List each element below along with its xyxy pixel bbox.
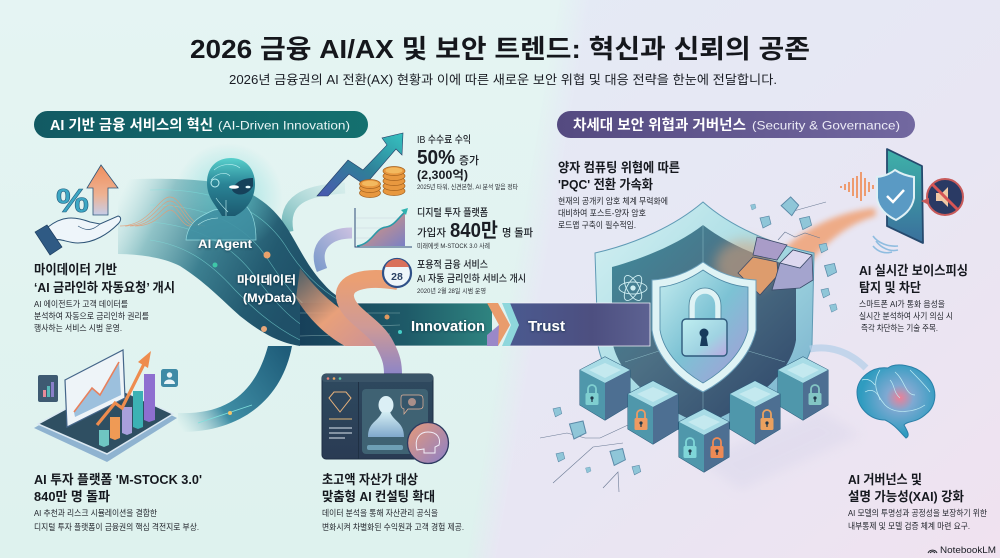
text block: high-net-worth consulting: 초고액 자산가 대상 — [322, 472, 418, 487]
text block: PQC transition — [558, 160, 680, 230]
text block: voice phishing: 탐지 및 차단 — [859, 280, 921, 295]
icon: hand with percent and arrow: % — [56, 182, 89, 219]
label: MyData — [237, 273, 296, 305]
connectors — [625, 392, 785, 403]
blocked speaker — [927, 179, 963, 215]
cube shadows — [700, 410, 860, 490]
text block: AI governance: 설명 가능성(XAI) 강화 — [848, 489, 964, 504]
lower ribbon — [178, 346, 292, 432]
icon: AI brain — [810, 348, 935, 438]
label: Trust: Trust — [528, 318, 565, 335]
NotebookLM badge: NotebookLM — [940, 545, 996, 556]
stat: IB fee income: 50% — [417, 147, 455, 169]
chevrons — [487, 303, 519, 346]
stat: digital platform users: 명 돌파 — [502, 227, 533, 239]
client panel — [362, 389, 428, 454]
text block: voice phishing: 즉각 차단하는 기술 주목. — [861, 323, 938, 333]
text block: high-net-worth consulting: 데이터 분석을 통해 자산관리 공식을 — [322, 508, 438, 518]
outer shield — [595, 202, 814, 440]
text block: mydata rate-cut request: 마이데이터 기반 — [34, 262, 117, 277]
stat: inclusive financial service: AI 자동 금리인하 서비스 개시 — [417, 272, 526, 285]
heading pill: AI-driven innovation: (AI-Driven Innovation) — [218, 118, 350, 132]
sound wave — [841, 172, 873, 201]
main data wave — [118, 179, 370, 346]
text block: voice phishing: AI 실시간 보이스피싱 — [859, 263, 968, 278]
subtitle: 2026년 금융권의 AI 전환(AX) 현황과 이에 따른 새로운 보안 위협 및 대응 전략을 한눈에 전달합니다. — [229, 73, 777, 87]
cube 4 — [730, 381, 780, 444]
flow ribbons — [118, 179, 492, 432]
main band — [300, 303, 492, 346]
label: MyData: (MyData) — [243, 293, 296, 305]
text block: mydata rate-cut request: 행사하는 서비스 시범 운영. — [34, 323, 122, 333]
icon: phone with shield — [841, 149, 963, 253]
orange-purple arc — [345, 279, 398, 375]
label: AI Agent: AI Agent — [198, 237, 252, 251]
text block: M-STOCK — [34, 472, 202, 532]
stat: digital platform users: 840만 — [450, 219, 498, 242]
text block: high-net-worth consulting — [322, 472, 464, 532]
chart screen — [65, 350, 125, 427]
padlock — [682, 288, 727, 356]
stat: digital platform users — [417, 206, 533, 250]
band streak lines — [300, 313, 400, 336]
text block: AI governance: AI 거버넌스 및 — [848, 472, 922, 487]
icon: area chart — [355, 208, 412, 247]
text block: M-STOCK: 840만 명 돌파 — [34, 489, 110, 504]
stat: inclusive financial service — [417, 259, 526, 295]
text block: PQC transition: 'PQC' 전환 가속화 — [558, 177, 653, 192]
stat: digital platform users: 디지털 투자 플랫폼 — [417, 206, 488, 219]
data lines on wave — [150, 190, 350, 340]
brain badge — [408, 422, 448, 464]
text block: PQC transition: 현재의 공개키 암호 체계 무력화에 — [558, 196, 668, 206]
diamond icon — [329, 392, 351, 412]
text block: AI governance: AI 모델의 투명성과 공정성을 보장하기 위한 — [848, 508, 987, 518]
text block: mydata rate-cut request: 분석하여 자동으로 금리인하 권리를 — [34, 311, 149, 321]
mini card — [38, 375, 58, 402]
title: 2026 금융 AI/AX 및 보안 트렌드: 혁신과 신뢰의 공존 — [190, 34, 810, 64]
heading pill: security and governance — [557, 111, 915, 138]
label: Innovation: Innovation — [411, 318, 485, 335]
icon: calendar — [383, 259, 411, 287]
stat: digital platform users: 가입자 — [417, 226, 446, 239]
speech bubble — [401, 395, 423, 414]
blockchain cubes — [580, 357, 860, 490]
shards and cracks — [540, 196, 837, 492]
icon: growth arrow with coins — [317, 133, 405, 198]
icon: isometric investing platform — [34, 350, 178, 462]
growth arrow — [97, 360, 146, 425]
text block: AI governance: 내부통제 및 모델 검증 체계 마련 요구. — [848, 521, 970, 531]
text block: PQC transition: 양자 컴퓨팅 위협에 따른 — [558, 160, 680, 175]
stat: IB fee income: 증가 — [459, 154, 479, 167]
heading pill: AI-driven innovation: AI 기반 금융 서비스의 혁신 — [50, 117, 213, 134]
stat: IB fee income: (2,300억) — [417, 168, 468, 182]
text block: mydata rate-cut request: AI 에이전트가 고객 데이터를 — [34, 299, 128, 309]
stat: IB fee income: 2025년 타워, 신견본형, AI 분석 말음 정타 — [417, 182, 518, 191]
shield circuit lines — [625, 225, 785, 425]
stat: IB fee income — [417, 134, 518, 191]
heading pill: security and governance: (Security & Governance) — [752, 118, 900, 132]
text block: AI governance — [848, 472, 987, 531]
warm light on shield — [715, 240, 775, 290]
band edges — [300, 303, 492, 346]
atom symbol — [619, 273, 647, 303]
orange wave — [296, 268, 388, 346]
text block: voice phishing — [859, 263, 968, 333]
signal waves — [873, 236, 898, 253]
blue arc ribbon — [319, 233, 352, 270]
orange attack beam — [772, 208, 876, 285]
user card — [161, 369, 178, 387]
cube 1 — [580, 357, 630, 420]
heading pill: AI-driven innovation — [34, 111, 368, 138]
phone body — [887, 149, 923, 243]
icon: calendar: 28 — [391, 271, 403, 283]
text block: M-STOCK: AI 투자 플랫폼 'M-STOCK 3.0' — [34, 472, 202, 487]
ribbon nodes — [212, 262, 218, 268]
cube 5 — [778, 357, 828, 420]
text block: M-STOCK: AI 추천과 리스크 시뮬레이션을 결합한 — [34, 508, 157, 518]
text block: PQC transition: 대비하여 포스트-양자 암호 — [558, 208, 646, 218]
text block: high-net-worth consulting: 변화시켜 차별화된 수익원과 고객 경험 제공. — [322, 522, 464, 532]
heading pill: security and governance: 차세대 보안 위협과 거버넌스 — [573, 117, 746, 134]
icon: hand with percent and arrow — [35, 165, 121, 255]
shield — [595, 202, 814, 440]
icon: consulting window — [322, 374, 448, 464]
cube 2 — [628, 381, 678, 444]
broken pieces — [738, 237, 813, 295]
stat: IB fee income: IB 수수료 수익 — [417, 134, 471, 146]
phone shield — [877, 170, 914, 220]
text block: M-STOCK: 디지털 투자 플랫폼이 금융권의 핵심 격전지로 부상. — [34, 522, 199, 532]
cube 3 — [679, 409, 729, 472]
bars — [99, 374, 155, 447]
teal arc ribbon — [287, 188, 345, 232]
stat: digital platform users: 미래에셋 M-STOCK 3.0 사례 — [417, 241, 490, 250]
AI agent figure — [173, 143, 283, 253]
text block: voice phishing: 실시간 분석하여 사기 의심 시 — [859, 311, 953, 321]
text block: voice phishing: 스마트폰 AI가 통화 음성을 — [859, 299, 945, 309]
trust band — [505, 303, 650, 346]
text block: PQC transition: 로드맵 구축이 필수적임. — [558, 220, 636, 230]
background — [485, 0, 1000, 558]
text block: mydata rate-cut request: ‘AI 금라인하 자동요청’ 개시 — [34, 280, 175, 295]
text block: high-net-worth consulting: 맞춤형 AI 컨설팅 확대 — [322, 489, 435, 504]
stat: inclusive financial service: 2020년 2월 28일 시범 운영 — [417, 286, 486, 295]
stat: inclusive financial service: 포용적 금융 서비스 — [417, 259, 488, 271]
inner shield — [652, 262, 756, 392]
orange wave crest — [120, 197, 205, 226]
label: MyData: 마이데이터 — [237, 273, 296, 287]
text block: mydata rate-cut request — [34, 262, 175, 333]
